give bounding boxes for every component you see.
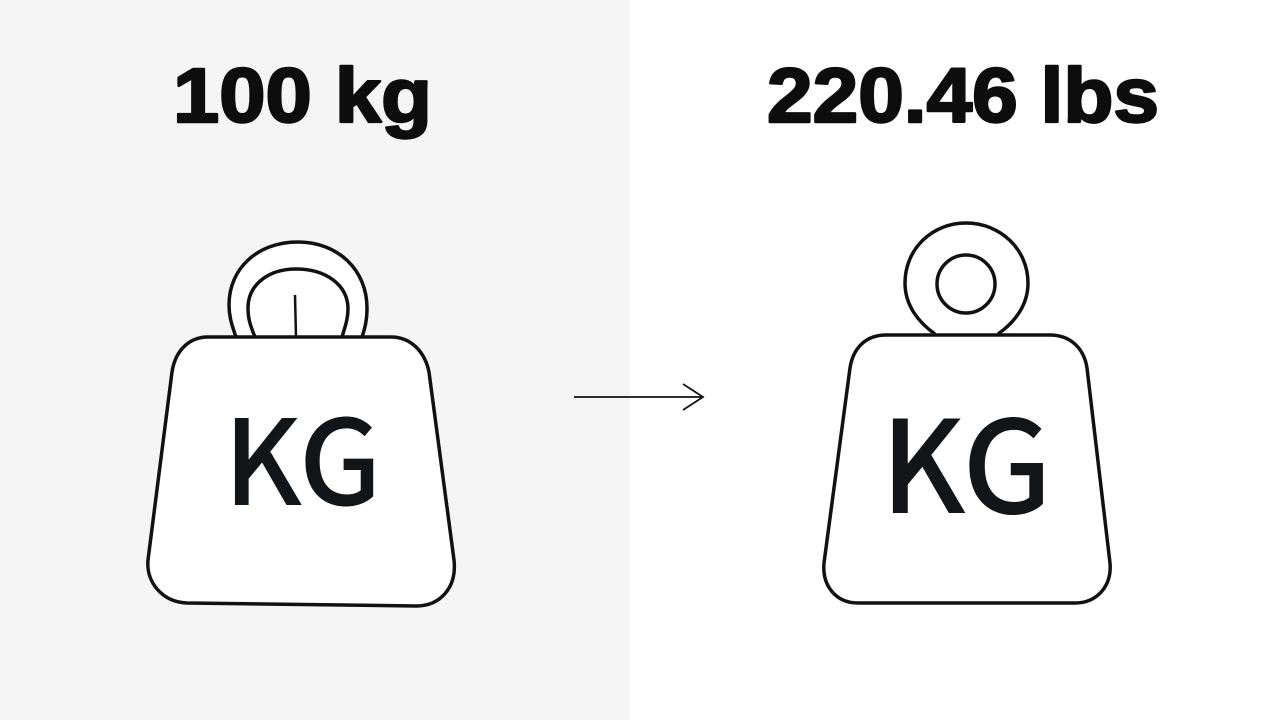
label: KG right: KG bbox=[880, 365, 1052, 550]
panel: left background bbox=[0, 0, 630, 720]
label: KG left: KG bbox=[224, 368, 382, 539]
arrow: conversion bbox=[574, 384, 703, 410]
icon: right kg weight bbox=[824, 223, 1110, 603]
icon: left kg weight bbox=[148, 242, 454, 606]
heading: 100 kg: 100 kg bbox=[173, 53, 432, 139]
heading: 220.46 lbs: 220.46 lbs bbox=[767, 53, 1159, 139]
